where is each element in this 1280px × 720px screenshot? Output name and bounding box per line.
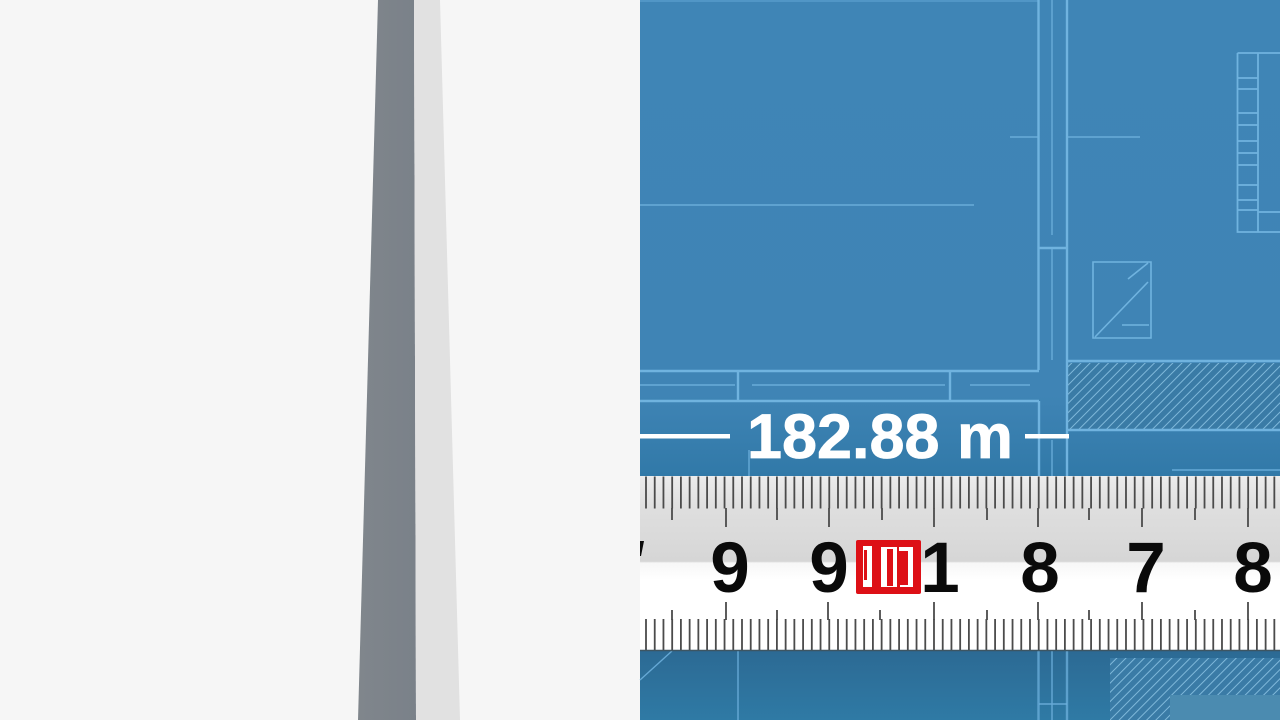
panel: blueprint background [640, 0, 1280, 720]
dimension label: 182.88 m [640, 402, 1069, 472]
dimension line left [640, 434, 730, 438]
tape numerals: 8 [1233, 529, 1273, 608]
obelisk lit face [414, 0, 460, 720]
tape numerals: 1 [920, 529, 960, 608]
blueprint thin lines [640, 0, 1280, 720]
obelisk tower [358, 0, 460, 720]
blueprint structural lines [640, 0, 1280, 720]
tape numerals: 9 [809, 529, 849, 608]
top ruler ticks [645, 492, 1280, 527]
dimension line right [1025, 434, 1069, 438]
tape numerals [710, 529, 1273, 608]
measuring tape [640, 476, 1280, 650]
blueprint hatched areas [1067, 363, 1280, 720]
tape numerals: 9 [710, 529, 750, 608]
red marker label [856, 540, 921, 594]
left panel background [0, 0, 640, 720]
partial numeral at tape edge [640, 541, 644, 556]
dimension value: 182.88 m [747, 402, 1013, 472]
obelisk shaded face [358, 0, 416, 720]
bottom ruler ticks [645, 602, 1280, 634]
tape numerals: 8 [1020, 529, 1060, 608]
tape numerals: 7 [1126, 529, 1166, 608]
tape body [640, 476, 1280, 650]
tape lower edge [640, 650, 1280, 652]
